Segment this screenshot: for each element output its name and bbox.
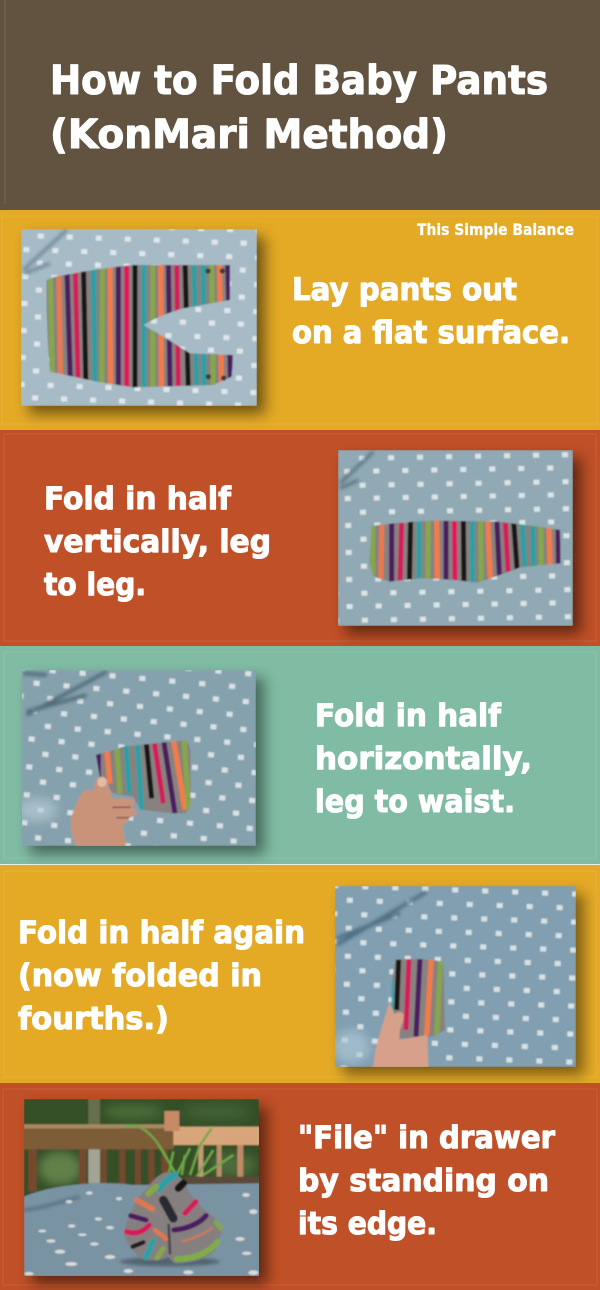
step 1 text: on a flat surface. — [292, 315, 570, 351]
icon: hand — [373, 1003, 428, 1067]
step 4 text: fourths.) — [18, 1001, 169, 1037]
title: How to Fold Baby Pants — [50, 58, 548, 104]
icon: hand — [71, 777, 137, 847]
credit: This Simple Balance: This Simple Balance — [417, 220, 574, 239]
step 3 text — [315, 698, 532, 820]
step 2 text: Fold in half — [44, 481, 231, 517]
step 3 text: horizontally, — [315, 741, 532, 777]
step 4 text: (now folded in — [18, 958, 262, 994]
panel: step 1 lay pants out — [0, 210, 600, 430]
step 3 text: Fold in half — [315, 698, 501, 734]
panel: step 2 fold vertically — [0, 430, 600, 646]
step 2 text: vertically, leg — [44, 524, 271, 560]
photo: pants standing on edge on deck — [24, 1099, 267, 1284]
step 4 text — [18, 915, 305, 1037]
panel: step 3 fold horizontally — [0, 646, 600, 865]
photo: pants folded in fourths — [333, 886, 584, 1075]
title: (KonMari Method) — [50, 112, 448, 158]
step 2 text: to leg. — [44, 567, 146, 603]
photo: pants folded vertically — [338, 450, 581, 634]
photo: pants folded leg to waist — [17, 670, 264, 854]
step 5 text — [298, 1120, 556, 1242]
step 5 text: "File" in drawer — [298, 1120, 556, 1156]
step 1 text — [292, 272, 570, 351]
step 3 text: leg to waist. — [315, 784, 515, 820]
step 1 text: Lay pants out — [292, 272, 517, 308]
panel: step 4 fold in fourths — [0, 865, 600, 1083]
photo: pants laid flat — [21, 229, 265, 414]
step 5 text: its edge. — [298, 1206, 437, 1242]
step 2 text — [44, 481, 271, 603]
icon: rolled striped pants — [124, 1172, 223, 1263]
step 5 text: by standing on — [298, 1163, 549, 1199]
panel: title header — [0, 0, 600, 210]
title — [50, 58, 548, 158]
step 4 text: Fold in half again — [18, 915, 305, 951]
panel: step 5 file in drawer — [0, 1083, 600, 1290]
